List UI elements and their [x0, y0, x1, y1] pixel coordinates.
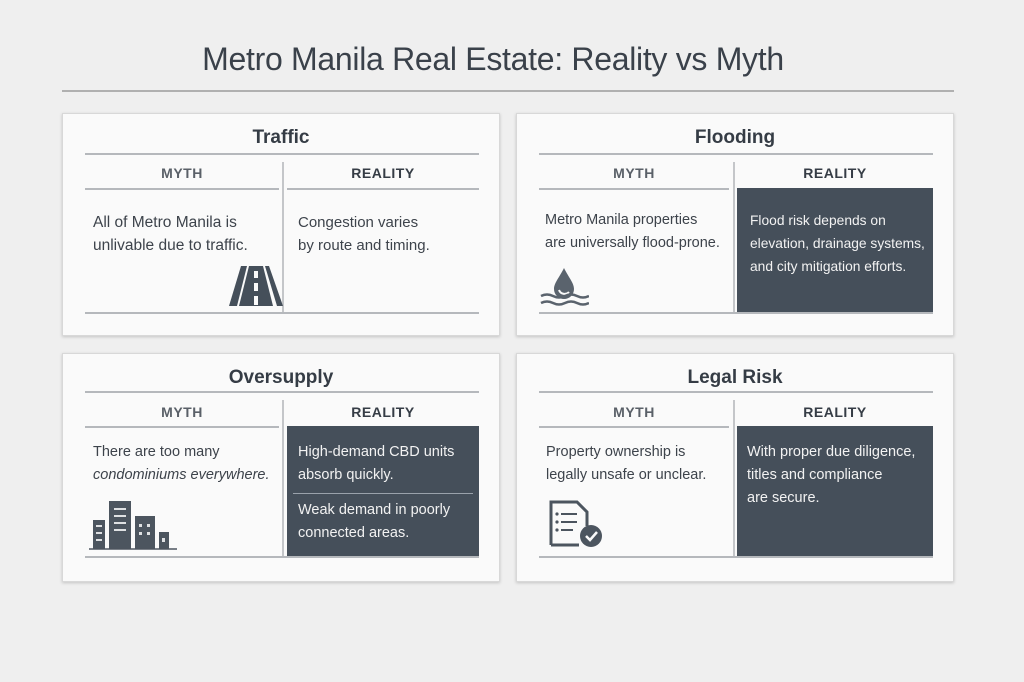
panel: flooding	[516, 113, 954, 336]
myth text: Metro Manila properties	[545, 212, 697, 228]
label: myth: MYTH	[613, 404, 655, 420]
title: Metro Manila Real Estate: Reality vs Myth	[202, 41, 784, 77]
reality text: are secure.	[747, 490, 820, 506]
reality text: by route and timing.	[298, 237, 430, 254]
icon: document check	[550, 500, 602, 547]
myth text: are universally flood-prone.	[545, 235, 720, 251]
myth text	[93, 444, 270, 483]
reality text: absorb quickly.	[298, 467, 394, 483]
reality text: Congestion varies	[298, 214, 418, 231]
heading: flooding: Flooding	[695, 127, 775, 148]
myth text: Property ownership is	[546, 444, 685, 460]
heading: traffic: Traffic	[252, 127, 310, 148]
panel: traffic	[62, 113, 500, 336]
reality text: With proper due diligence,	[747, 444, 915, 460]
myth text: legally unsafe or unclear.	[546, 467, 706, 483]
label: myth: MYTH	[161, 165, 203, 181]
reality box	[737, 426, 933, 556]
icon: road	[229, 266, 283, 306]
reality text	[298, 214, 430, 254]
myth text: All of Metro Manila is	[93, 214, 237, 231]
label: reality: REALITY	[803, 404, 867, 420]
label: reality: REALITY	[351, 404, 415, 420]
reality text: High-demand CBD units	[298, 444, 454, 460]
myth text	[545, 212, 720, 251]
label: reality: REALITY	[803, 165, 867, 181]
label: myth: MYTH	[161, 404, 203, 420]
reality text: Flood risk depends on	[750, 213, 886, 228]
myth text: There are too many	[93, 444, 220, 460]
myth text	[93, 214, 248, 254]
myth text	[546, 444, 706, 483]
reality box	[287, 426, 479, 556]
reality text	[750, 213, 925, 274]
panel: oversupply	[62, 353, 500, 582]
heading: oversupply: Oversupply	[229, 367, 333, 388]
myth text: unlivable due to traffic.	[93, 237, 248, 254]
reality text: elevation, drainage systems,	[750, 236, 925, 251]
reality text: titles and compliance	[747, 467, 882, 483]
panel: oversupply: Weak demand in poorly	[298, 502, 450, 518]
reality text: and city mitigation efforts.	[750, 259, 906, 274]
reality text	[298, 444, 454, 483]
icon: buildings	[89, 501, 177, 550]
heading: legal risk: Legal Risk	[687, 367, 783, 388]
myth text: condominiums everywhere.	[93, 467, 270, 483]
reality text	[747, 444, 915, 506]
reality box	[737, 188, 933, 312]
label: myth: MYTH	[613, 165, 655, 181]
label: reality: REALITY	[351, 165, 415, 181]
icon: water drop	[540, 268, 589, 306]
panel: legal risk	[516, 353, 954, 582]
panel: oversupply: connected areas.	[298, 525, 409, 541]
